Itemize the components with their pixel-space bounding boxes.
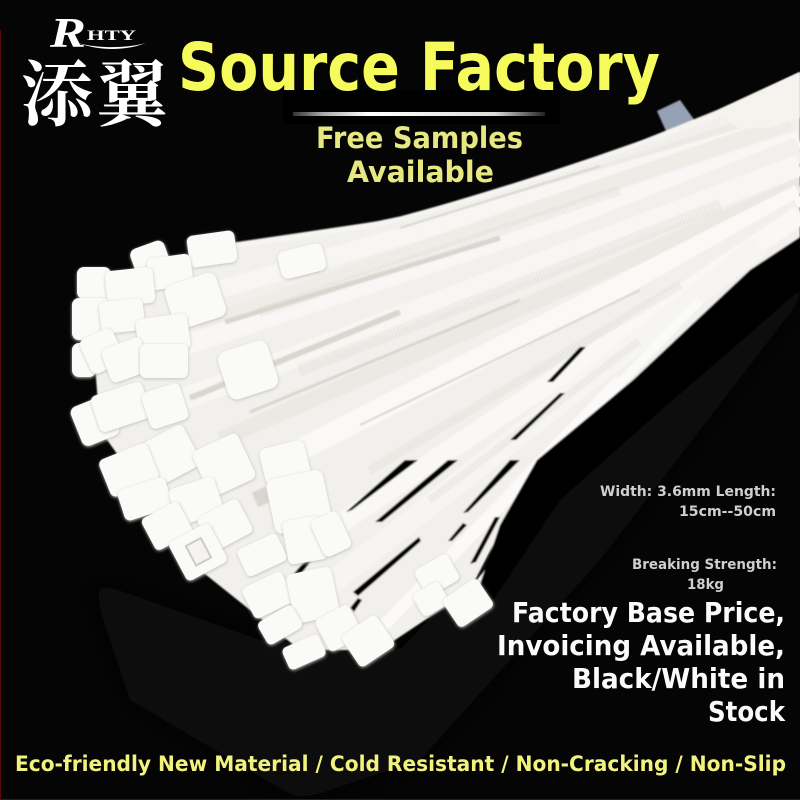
price and stock callout: Invoicing Available, xyxy=(497,629,785,662)
price and stock callout: Stock xyxy=(708,695,786,728)
title: Source Factory xyxy=(178,29,660,106)
title bar with highlight line xyxy=(283,90,560,124)
open tie head with slot xyxy=(167,522,229,582)
spec: size: Width: 3.6mm Length: xyxy=(600,484,776,500)
spec: breaking strength xyxy=(632,557,777,593)
subtitle: Available xyxy=(347,155,494,189)
logo chinese name: 添翼 xyxy=(21,37,175,141)
spec: breaking strength: 18kg xyxy=(687,577,724,593)
strap shadows xyxy=(190,166,640,500)
logo latin mark: HTY xyxy=(87,28,136,44)
subtitle xyxy=(316,121,523,189)
straps xyxy=(150,112,800,640)
logo xyxy=(21,11,175,141)
subtitle: Free Samples xyxy=(316,121,523,155)
logo latin mark xyxy=(49,11,146,57)
logo latin mark: R xyxy=(49,11,86,57)
tie heads xyxy=(69,230,495,671)
price and stock callout: Black/White in xyxy=(572,662,785,695)
strap ribs xyxy=(260,190,720,500)
feature strip: Eco-friendly New Material / Cold Resistant / Non-Cracking / Non-Slip xyxy=(15,752,786,776)
spec: size xyxy=(600,484,776,520)
spec: size: 15cm--50cm xyxy=(679,504,776,520)
gaps between straps xyxy=(290,237,800,612)
reflection of the cable ties on the dark surface xyxy=(90,260,800,800)
cable tie bundle xyxy=(69,72,800,671)
strap collar band xyxy=(716,72,800,128)
price and stock callout xyxy=(497,596,786,728)
small tie head behind bundle xyxy=(657,100,703,142)
strap mass xyxy=(90,72,800,650)
spec: breaking strength: Breaking Strength: xyxy=(632,557,777,573)
